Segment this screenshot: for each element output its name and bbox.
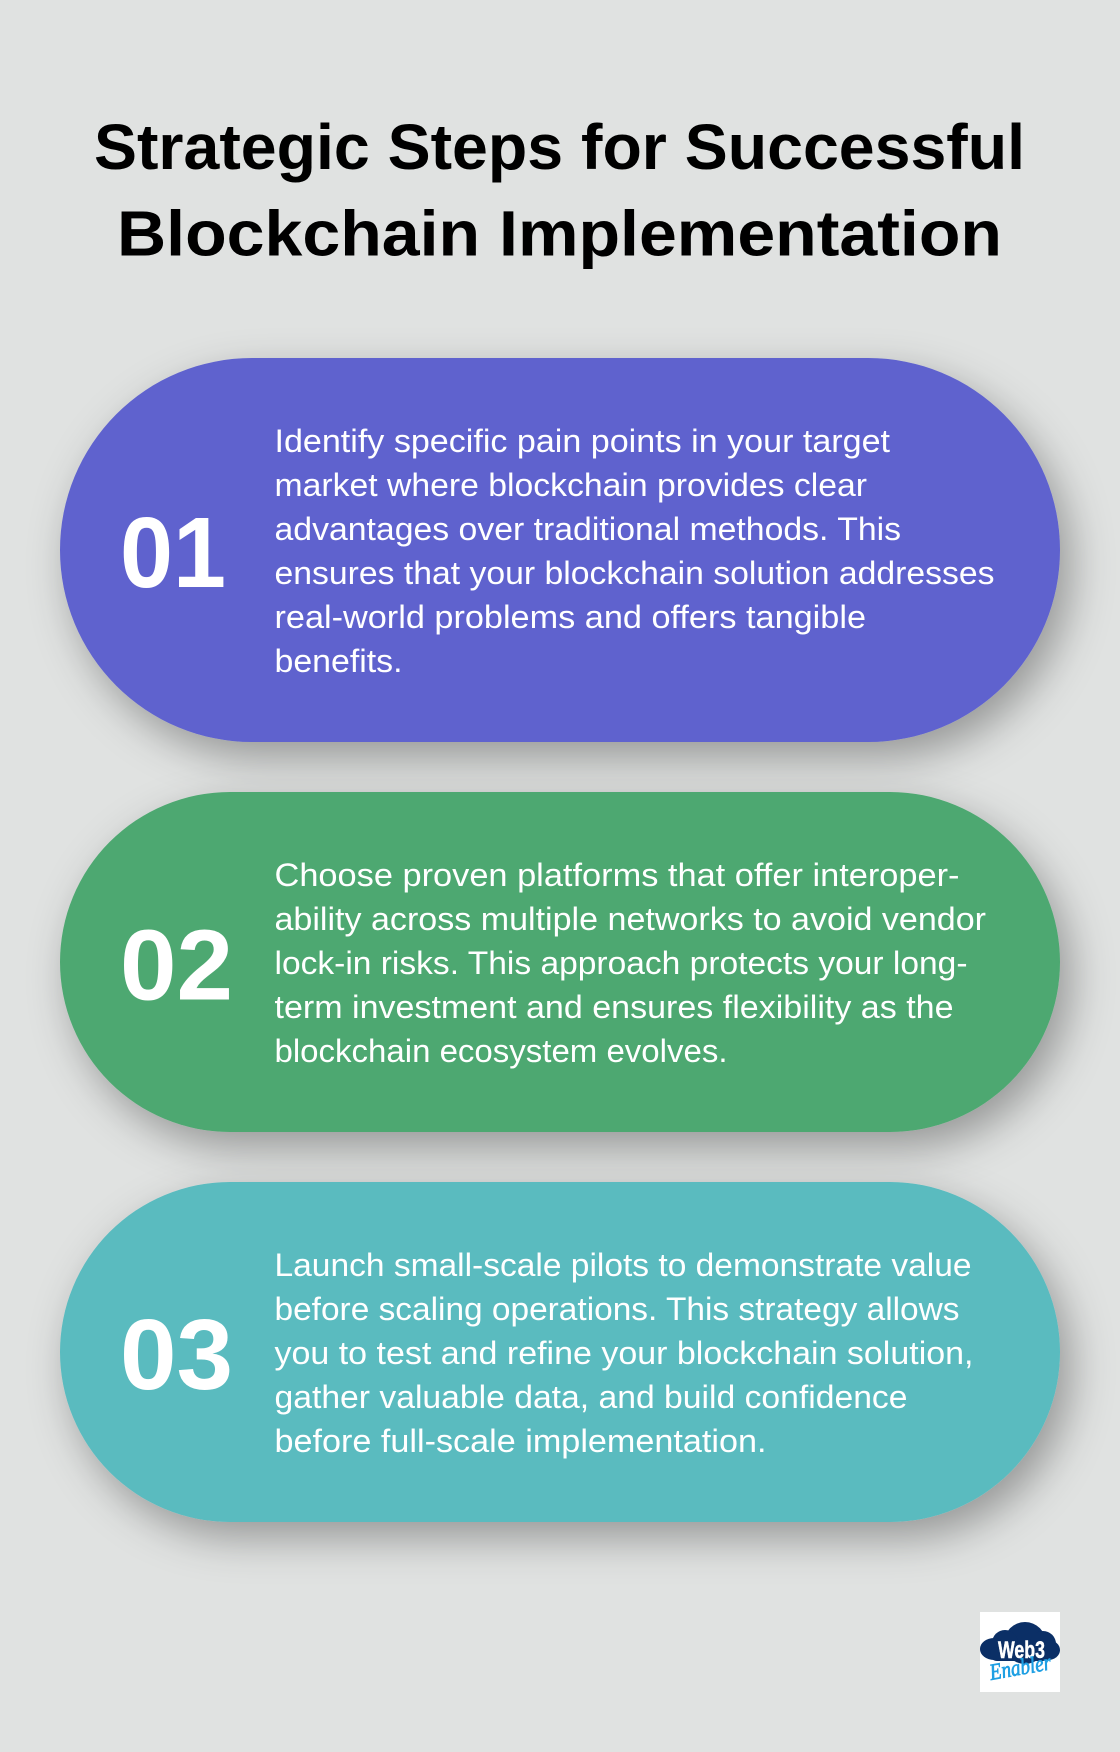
text block: step 03 description: Launch small-scale pilots to demonstrate value bbox=[274, 1247, 972, 1283]
text block: step 02 description: blockchain ecosystem evolves. bbox=[274, 1033, 728, 1069]
icon: Web3 Enabler logo bbox=[980, 1612, 1060, 1692]
text block: step 01 description: real-world problems and offers tangible bbox=[274, 599, 866, 635]
text block: step 03 description: before scaling operations. This strategy allows bbox=[274, 1291, 960, 1327]
panel: step 02 bbox=[60, 792, 1060, 1132]
title: Blockchain Implementation bbox=[117, 198, 1002, 270]
number: 02: 02 bbox=[120, 910, 233, 1022]
text block: step 03 description: gather valuable data, and build confidence bbox=[274, 1379, 907, 1415]
title: Strategic Steps for Successful bbox=[94, 111, 1025, 183]
text block: step 01 description: benefits. bbox=[274, 643, 402, 679]
text block: step 01 description bbox=[274, 423, 994, 679]
text block: step 03 description: before full-scale implementation. bbox=[274, 1423, 766, 1459]
number: 03: 03 bbox=[120, 1299, 233, 1411]
text block: step 02 description: lock-in risks. This approach protects your long- bbox=[274, 945, 968, 981]
icon: cloud bbox=[980, 1622, 1060, 1664]
panel: step 01 bbox=[60, 358, 1060, 742]
text block: step 01 description: advantages over traditional methods. This bbox=[274, 511, 901, 547]
logo wordmark: Enabler: Enabler bbox=[987, 1649, 1054, 1685]
pill background: step 03 bbox=[60, 1182, 1060, 1522]
text block: step 03 description: you to test and refine your blockchain solution, bbox=[274, 1335, 974, 1371]
title bbox=[94, 111, 1025, 270]
pill background: step 02 bbox=[60, 792, 1060, 1132]
text block: step 03 description bbox=[274, 1247, 974, 1459]
logo wordmark: Web3: Web3 bbox=[998, 1637, 1045, 1664]
text block: step 02 description: ability across multiple networks to avoid vendor bbox=[274, 901, 986, 937]
text block: step 01 description: ensures that your blockchain solution addresses bbox=[274, 555, 994, 591]
pill background: step 01 bbox=[60, 358, 1060, 742]
text block: step 01 description: Identify specific pain points in your target bbox=[274, 423, 890, 459]
number: 01: 01 bbox=[120, 497, 226, 609]
text block: step 02 description: term investment and ensures flexibility as the bbox=[274, 989, 954, 1025]
panel: step 03 bbox=[60, 1182, 1060, 1522]
text block: step 02 description: Choose proven platforms that offer interoper- bbox=[274, 857, 960, 893]
text block: step 02 description bbox=[274, 857, 986, 1069]
text block: step 01 description: market where blockchain provides clear bbox=[274, 467, 867, 503]
